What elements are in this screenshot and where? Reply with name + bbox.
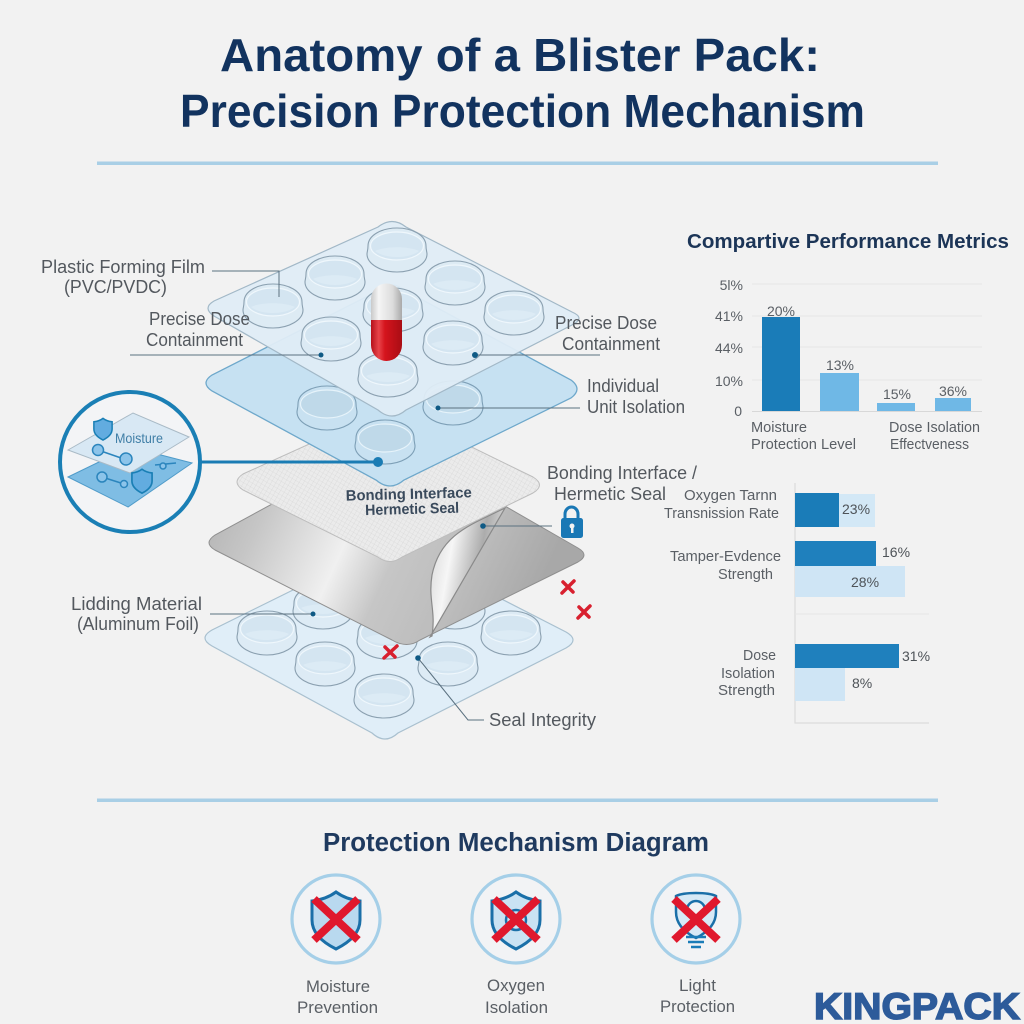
label: moisture prevention: Moisture <box>306 977 370 996</box>
label: precise dose containment left: Containment <box>146 330 243 350</box>
y axis labels: 10% <box>715 373 743 389</box>
label: plastic forming film: (PVC/PVDC) <box>64 277 167 297</box>
mesh label: Bonding Interface <box>346 484 472 505</box>
label: oxygen isolation <box>485 976 548 1017</box>
x axis labels: Moisture <box>751 419 807 436</box>
mesh label <box>346 484 472 520</box>
layer: blue barrier sheet with cavities <box>206 285 577 486</box>
bar chart: vertical metrics <box>715 277 982 453</box>
heading: protection mechanism diagram: Protection Mechanism Diagram <box>323 829 709 857</box>
callout: moisture inset <box>60 392 383 532</box>
label: oxygen isolation: Oxygen <box>487 976 545 995</box>
row labels: Strength <box>718 566 773 583</box>
y axis labels <box>715 277 743 419</box>
y axis labels: 0 <box>734 403 742 419</box>
label: seal integrity <box>415 655 596 730</box>
bar values: 28% <box>851 574 879 590</box>
row labels: Strength <box>718 682 775 699</box>
x axis labels <box>751 419 980 453</box>
icon: oxygen isolation <box>472 875 560 963</box>
x axis labels: Protection Level <box>751 436 856 453</box>
bar values: 13% <box>826 357 854 373</box>
label: precise dose containment left <box>130 309 324 358</box>
bar values: 31% <box>902 648 930 664</box>
label: bonding interface / hermetic seal: Bonding Interface / <box>547 463 697 483</box>
peeled foil corner <box>430 508 505 637</box>
label: oxygen isolation: Isolation <box>485 998 548 1017</box>
y axis labels: 5l% <box>720 277 743 293</box>
x axis labels: Effectveness <box>890 436 969 453</box>
row labels: Tamper-Evdence <box>670 548 781 565</box>
label: moisture prevention <box>297 977 378 1017</box>
icon: padlock <box>561 507 583 538</box>
label: individual unit isolation: Unit Isolation <box>587 397 685 417</box>
label: precise dose containment right: Precise Dose <box>555 313 657 333</box>
label: lidding material: Lidding Material <box>71 594 202 614</box>
bar values: 8% <box>852 675 872 691</box>
bar values: 15% <box>883 386 911 402</box>
layer: aluminum foil lidding <box>209 440 584 644</box>
label: lidding material <box>71 594 316 634</box>
label: bonding interface / hermetic seal <box>480 463 697 529</box>
label: moisture prevention: Prevention <box>297 998 378 1017</box>
title: Precision Protection Mechanism <box>180 85 865 137</box>
bar values <box>842 501 930 691</box>
row labels: Isolation <box>721 665 775 682</box>
label: light protection: Protection <box>660 997 735 1016</box>
icon: capsule <box>371 283 402 361</box>
label: seal integrity: Seal Integrity <box>489 710 596 730</box>
bars <box>839 494 875 527</box>
bar values: 20% <box>767 303 795 319</box>
inset nodes <box>92 444 176 488</box>
title <box>180 29 865 137</box>
bar values <box>767 303 967 402</box>
x axis labels: Dose Isolation <box>889 419 980 436</box>
label: plastic forming film <box>41 257 279 297</box>
title: Anatomy of a Blister Pack: <box>220 29 820 81</box>
red x marks <box>384 581 590 658</box>
row labels: Oxygen Tarnn <box>684 487 777 504</box>
label: individual unit isolation: Individual <box>587 376 659 396</box>
label: precise dose containment right: Containment <box>562 334 660 354</box>
label: bonding interface / hermetic seal: Hermetic Seal <box>554 484 666 504</box>
bar values: 23% <box>842 501 870 517</box>
label: individual unit isolation <box>436 376 685 417</box>
icon: moisture prevention <box>292 875 380 963</box>
row labels <box>664 487 781 699</box>
bars <box>762 317 800 411</box>
label: light protection: Light <box>679 976 716 995</box>
label: plastic forming film: Plastic Forming Film <box>41 257 205 277</box>
callout: moisture inset: Moisture <box>115 430 163 446</box>
label: lidding material: (Aluminum Foil) <box>77 614 199 634</box>
y axis labels: 41% <box>715 308 743 324</box>
label: precise dose containment left: Precise Dose <box>149 309 250 329</box>
layer: bonding interface mesh <box>237 408 540 562</box>
label: precise dose containment right <box>472 313 660 358</box>
mesh label: Hermetic Seal <box>365 500 459 519</box>
row labels: Dose <box>743 647 776 664</box>
heading: comparative performance metrics: Compartive Performance Metrics <box>687 230 1009 253</box>
row labels: Transnission Rate <box>664 505 779 522</box>
bar values: 16% <box>882 544 910 560</box>
y axis labels: 44% <box>715 340 743 356</box>
icon: light protection <box>652 875 740 963</box>
exploded blister pack diagram <box>205 222 590 739</box>
bar chart: horizontal metrics <box>664 483 930 723</box>
bar values: 36% <box>939 383 967 399</box>
layer: plastic forming film with cavities <box>208 222 579 416</box>
layer: bottom film with cavities <box>205 543 573 739</box>
label: light protection <box>660 976 735 1016</box>
inset shields <box>94 418 152 493</box>
